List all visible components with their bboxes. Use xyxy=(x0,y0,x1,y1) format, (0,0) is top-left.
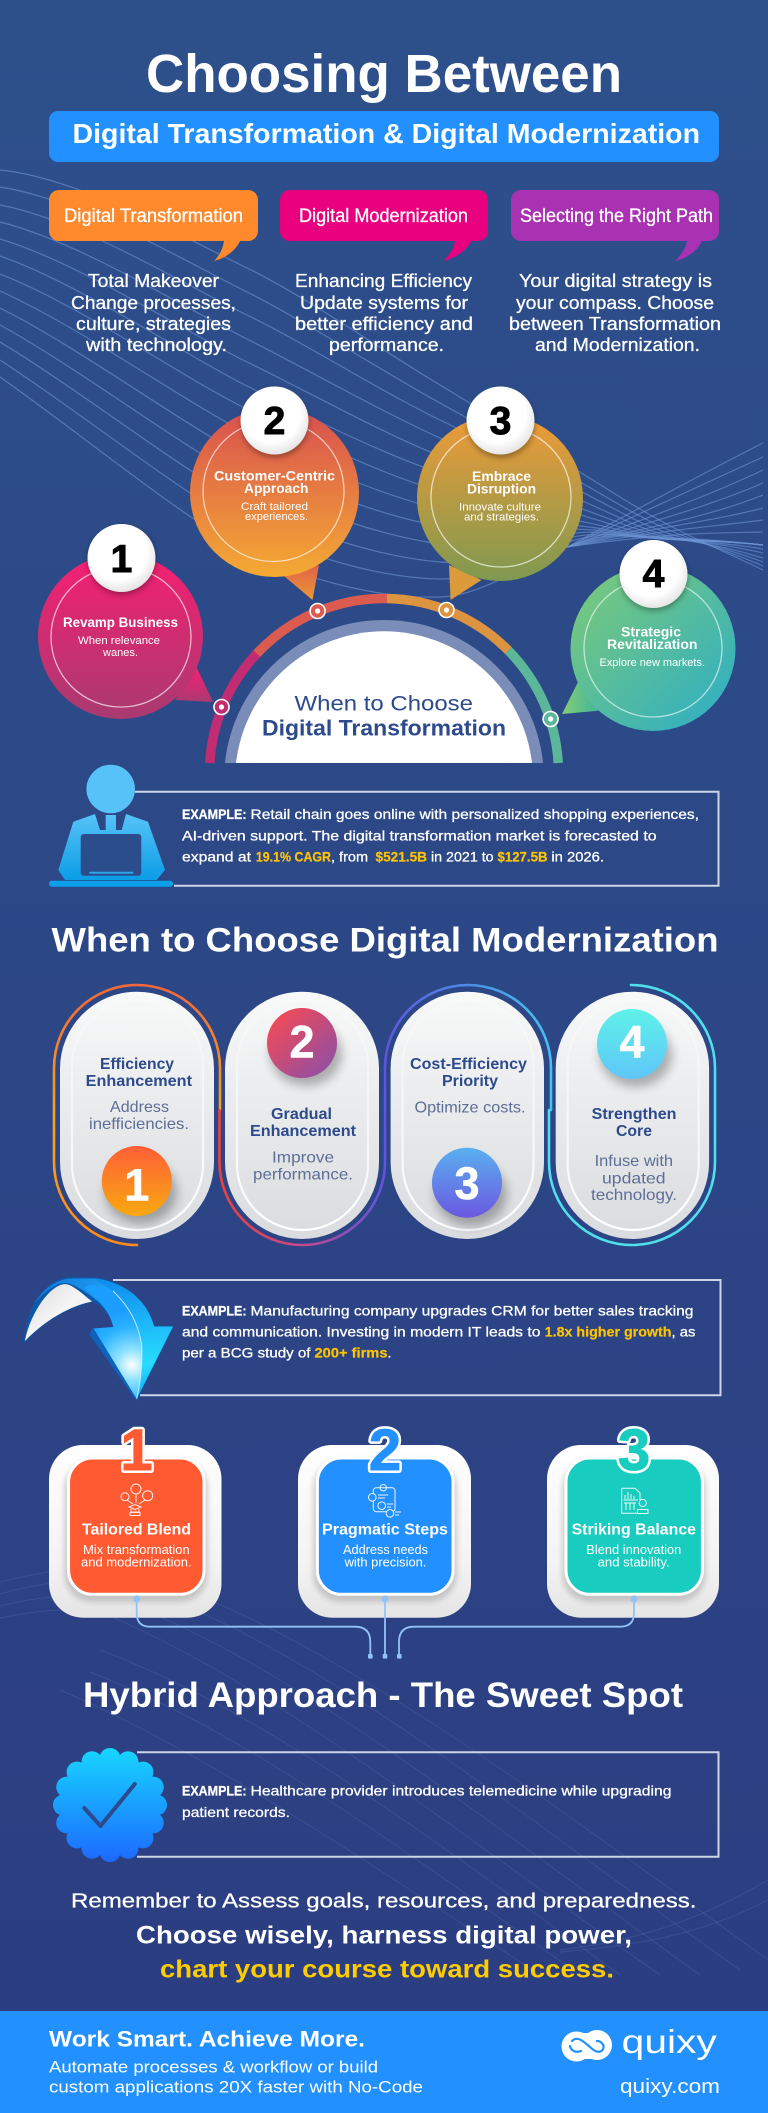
number circle xyxy=(432,1148,507,1226)
callout text: Revamp Business xyxy=(63,615,178,630)
subtitle banner xyxy=(49,111,719,162)
footer tagline: Work Smart. Achieve More. xyxy=(49,2027,365,2052)
description xyxy=(509,271,721,355)
large number: 1 xyxy=(120,1418,153,1483)
example text: . xyxy=(388,1345,391,1361)
pill highlight xyxy=(72,1000,203,1230)
pill text: Optimize costs. xyxy=(414,1100,526,1117)
number circle: 1 xyxy=(124,1160,149,1211)
footer description xyxy=(49,2058,423,2096)
callout text: Embrace xyxy=(472,469,531,484)
heading: hybrid approach: Hybrid Approach - The Sweet Spot xyxy=(83,1676,683,1715)
example text: , as xyxy=(672,1324,696,1340)
wave outline around pills xyxy=(54,985,715,1245)
column: digital modernization xyxy=(280,190,488,355)
arch label: When to Choose xyxy=(294,692,473,716)
example box 3 xyxy=(53,1748,718,1862)
ring xyxy=(584,579,722,717)
pointer xyxy=(284,565,319,600)
quixy logo mark xyxy=(562,2030,612,2062)
pill body xyxy=(60,992,214,1239)
callout 1: revamp business xyxy=(38,524,213,719)
pill text: updated xyxy=(602,1170,666,1187)
card 2: pragmatic steps xyxy=(298,1418,471,1618)
large number: 2 xyxy=(369,1418,401,1483)
card 3: striking balance xyxy=(547,1418,719,1618)
pill text: Strengthen xyxy=(592,1106,676,1123)
callout text: Craft tailored xyxy=(241,501,308,513)
card fill xyxy=(69,1458,204,1594)
pill text: Gradual xyxy=(271,1106,332,1123)
number circle xyxy=(102,1146,177,1224)
box outline xyxy=(135,792,718,886)
description: Update systems for xyxy=(300,293,468,313)
ring xyxy=(431,427,571,567)
box outline xyxy=(137,1752,718,1857)
card text xyxy=(322,1521,448,1570)
speech bubble: digital transformation xyxy=(49,190,258,261)
disc xyxy=(570,566,736,731)
description: Change processes, xyxy=(71,293,236,313)
callout text xyxy=(63,615,178,659)
number circle: 2 xyxy=(289,1017,315,1068)
footer band xyxy=(0,2011,768,2113)
example text: Retail chain goes online with personalized shopping experiences, xyxy=(250,806,699,822)
pointer xyxy=(562,682,598,714)
description xyxy=(295,271,473,355)
callout text: When relevance xyxy=(78,635,160,647)
description: performance. xyxy=(329,335,444,355)
description: between Transformation xyxy=(509,314,721,334)
title: Choosing Between xyxy=(146,44,622,104)
pill body xyxy=(391,992,544,1239)
pill text: Priority xyxy=(442,1073,498,1090)
pill text: Improve xyxy=(272,1149,334,1166)
callout text: Disruption xyxy=(467,482,536,496)
ring xyxy=(51,567,191,707)
pill text: Core xyxy=(616,1123,652,1140)
example text: EXAMPLE: xyxy=(182,806,246,822)
example box 2 xyxy=(24,1277,720,1401)
card text: and modernization. xyxy=(81,1555,192,1570)
number badge xyxy=(466,386,535,458)
disc xyxy=(190,408,359,577)
example box 1 xyxy=(49,765,718,887)
example text: per a BCG study of xyxy=(182,1345,311,1361)
pointer xyxy=(449,565,482,600)
pill text: Efficiency xyxy=(100,1056,174,1073)
pill text: technology. xyxy=(591,1187,677,1204)
card 1: tailored blend xyxy=(49,1418,222,1618)
pill 1: efficiency enhancement xyxy=(60,992,214,1239)
bubble heading: Digital Transformation xyxy=(64,206,243,227)
example text: AI-driven support. The digital transformation market is forecasted to xyxy=(182,827,657,843)
bubble heading: Selecting the Right Path xyxy=(520,206,713,227)
large number: 3 xyxy=(618,1418,650,1483)
speech bubble: selecting the right path xyxy=(511,190,719,261)
card text: Pragmatic Steps xyxy=(322,1521,448,1538)
number badge: 1 xyxy=(111,538,132,581)
card text: and stability. xyxy=(598,1555,670,1570)
pill 2: gradual enhancement xyxy=(225,992,379,1239)
description: and Modernization. xyxy=(535,335,700,355)
card frame xyxy=(547,1445,719,1618)
closing message: Choose wisely, harness digital power, xyxy=(136,1921,632,1949)
number badge: 2 xyxy=(264,400,285,443)
card frame xyxy=(49,1445,222,1618)
example text: EXAMPLE: xyxy=(182,1302,246,1318)
example text xyxy=(182,806,699,864)
number circle: 4 xyxy=(619,1017,645,1068)
callout text: Revitalization xyxy=(607,637,698,652)
callout 3: embrace disruption xyxy=(417,386,583,600)
example text: Manufacturing company upgrades CRM for better sales tracking xyxy=(250,1302,694,1318)
callout text: Approach xyxy=(244,481,308,496)
pill highlight xyxy=(403,1000,534,1230)
arch: when to choose digital transformation xyxy=(210,598,558,763)
pill text xyxy=(410,1056,527,1117)
example text: EXAMPLE: xyxy=(182,1783,246,1799)
callout 4: strategic revitalization xyxy=(562,540,736,731)
description: culture, strategies xyxy=(76,314,231,334)
closing message: chart your course toward success. xyxy=(160,1956,614,1984)
inner arch white xyxy=(236,631,532,763)
arch label xyxy=(262,692,506,740)
pill text: performance. xyxy=(253,1166,353,1183)
card fill xyxy=(566,1458,702,1594)
pill text xyxy=(250,1106,356,1183)
number circle xyxy=(597,1009,672,1087)
callout text xyxy=(214,468,336,523)
icon: verified badge xyxy=(53,1748,167,1862)
pointer xyxy=(175,668,213,702)
closing message: Remember to Assess goals, resources, and preparedness. xyxy=(71,1889,696,1912)
icon: numbered checklist xyxy=(368,1484,401,1517)
callout text xyxy=(600,624,705,669)
example text: $521.5B xyxy=(376,848,427,864)
card text: Striking Balance xyxy=(572,1521,696,1538)
footer description: Automate processes & workflow or build xyxy=(49,2058,378,2077)
pill 4: strengthen core xyxy=(556,992,709,1239)
callout 2: customer-centric approach xyxy=(190,386,359,600)
icon: learning options xyxy=(121,1484,153,1516)
callout text: Customer-Centric xyxy=(214,468,336,484)
card text: with precision. xyxy=(344,1555,426,1570)
icon: person at laptop xyxy=(49,765,173,887)
number circle xyxy=(267,1008,342,1086)
pill text: inefficiencies. xyxy=(89,1116,189,1133)
footer description: custom applications 20X faster with No-Code xyxy=(49,2077,423,2096)
pill 3: cost-efficiency priority xyxy=(391,992,544,1239)
icon: report document xyxy=(622,1488,648,1514)
arc marker dots xyxy=(214,602,558,726)
card text xyxy=(572,1521,696,1570)
pill text xyxy=(591,1106,677,1204)
pill text: Enhancement xyxy=(250,1123,356,1140)
callout text xyxy=(459,469,541,524)
callout text: and strategies. xyxy=(464,512,539,524)
large number: 3 xyxy=(618,1418,650,1483)
outer arc: red xyxy=(257,598,387,654)
example text: $127.5B xyxy=(498,848,548,864)
bubble heading: Digital Modernization xyxy=(299,206,468,227)
callout text: wanes. xyxy=(102,647,138,659)
inner arch band xyxy=(225,620,543,763)
closing message xyxy=(71,1889,696,1984)
card text xyxy=(81,1521,192,1570)
description: with technology. xyxy=(85,335,227,355)
disc xyxy=(417,415,583,581)
pill text: Cost-Efficiency xyxy=(410,1056,527,1073)
example text: and communication. Investing in modern IT leads to xyxy=(182,1324,541,1340)
pill body xyxy=(225,992,379,1239)
callout text: Innovate culture xyxy=(459,502,541,514)
heading: when to choose digital modernization: When to Choose Digital Modernization xyxy=(52,922,718,960)
callout text: Explore new markets. xyxy=(600,657,705,669)
example text: in 2021 to xyxy=(431,848,494,864)
outer arc: pink xyxy=(210,654,257,763)
example text: Healthcare provider introduces telemedicine while upgrading xyxy=(250,1783,672,1799)
large number: 1 xyxy=(120,1418,153,1483)
outer arc: orange xyxy=(387,598,508,651)
number badge: 3 xyxy=(490,400,511,443)
outer arc: green xyxy=(508,651,558,763)
connector lines to hybrid heading xyxy=(133,1595,637,1659)
description: Your digital strategy is xyxy=(519,271,712,291)
card text: Blend innovation xyxy=(586,1542,681,1557)
column: digital transformation xyxy=(49,190,258,355)
pill highlight xyxy=(568,1000,699,1230)
website: quixy.com xyxy=(620,2076,720,2098)
speech bubble: digital modernization xyxy=(280,190,488,261)
card text: Mix transformation xyxy=(83,1542,190,1557)
pill text: Enhancement xyxy=(86,1073,192,1090)
number circle: 3 xyxy=(454,1158,480,1209)
number badge xyxy=(240,386,309,458)
disc xyxy=(38,554,203,719)
ring xyxy=(203,420,344,562)
example text: in 2026. xyxy=(551,848,604,864)
number badge: 4 xyxy=(643,553,665,596)
example text: patient records. xyxy=(182,1804,290,1820)
description: Total Makeover xyxy=(88,271,219,291)
pill highlight xyxy=(237,1000,368,1230)
column: selecting the right path xyxy=(509,190,721,355)
pill body xyxy=(556,992,709,1239)
example text: 19.1% CAGR xyxy=(256,848,331,864)
card frame xyxy=(298,1445,471,1618)
number badge xyxy=(620,540,688,611)
example text: , from xyxy=(331,848,368,864)
card text: Address needs xyxy=(343,1542,428,1557)
callout text: experiences. xyxy=(245,511,308,523)
description xyxy=(71,271,236,355)
example text: 200+ firms xyxy=(314,1345,388,1361)
example text: 1.8x higher growth xyxy=(545,1324,672,1340)
callout text: Strategic xyxy=(621,624,681,640)
pill text: Infuse with xyxy=(595,1153,673,1170)
box outline xyxy=(113,1280,720,1395)
pill text xyxy=(86,1056,192,1133)
arch label: Digital Transformation xyxy=(262,716,506,740)
large number: 2 xyxy=(369,1418,401,1483)
description: Enhancing Efficiency xyxy=(295,271,472,291)
card text: Tailored Blend xyxy=(82,1521,191,1538)
example text xyxy=(182,1783,672,1820)
pill text: Address xyxy=(110,1099,169,1116)
card fill xyxy=(317,1458,453,1594)
subtitle banner: Digital Transformation & Digital Modernization xyxy=(72,118,700,149)
quixy wordmark: quixy xyxy=(622,2023,717,2060)
description: better efficiency and xyxy=(295,314,473,334)
example text xyxy=(182,1302,696,1361)
description: your compass. Choose xyxy=(516,293,714,313)
icon: curved down arrow xyxy=(24,1277,174,1401)
number badge xyxy=(88,524,156,595)
example text: expand at xyxy=(182,848,251,864)
